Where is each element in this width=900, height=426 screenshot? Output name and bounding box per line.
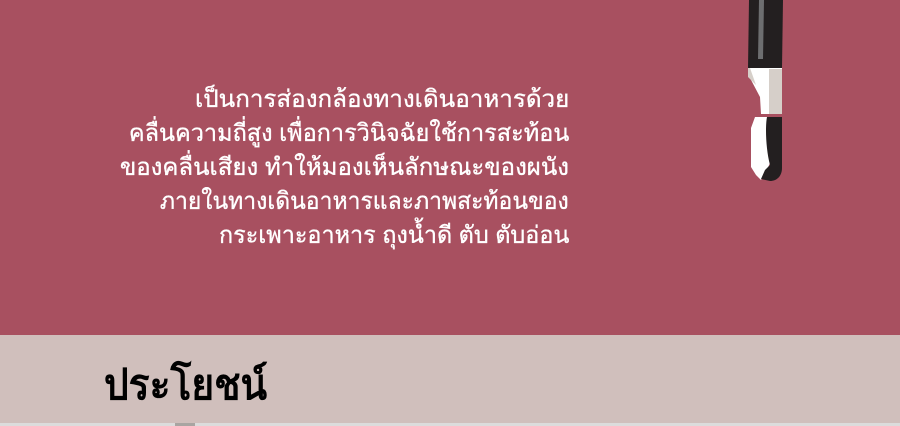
- text block: description: ของคลื่นเสียง ทำให้มองเห็นลักษณะของผนัง: [120, 154, 569, 181]
- text block: description: ภายในทางเดินอาหารและภาพสะท้อนของ: [160, 188, 569, 215]
- text block: description: [120, 84, 569, 250]
- text block: description: กระเพาะอาหาร ถุงน้ำดี ตับ ตับอ่อน: [219, 222, 569, 249]
- panel: benefits heading band: [0, 335, 900, 423]
- heading: benefits: ประโยชน์: [104, 361, 267, 408]
- text block: description: คลื่นความถี่สูง เพื่อการวินิจฉัยใช้การสะท้อน: [129, 120, 569, 147]
- panel: bottom strip: [0, 423, 900, 426]
- panel: upper maroon background: [0, 0, 900, 335]
- icon: endoscope probe: [748, 0, 783, 181]
- text block: description: เป็นการส่องกล้องทางเดินอาหารด้วย: [195, 86, 569, 113]
- marker: grey block: [175, 423, 195, 426]
